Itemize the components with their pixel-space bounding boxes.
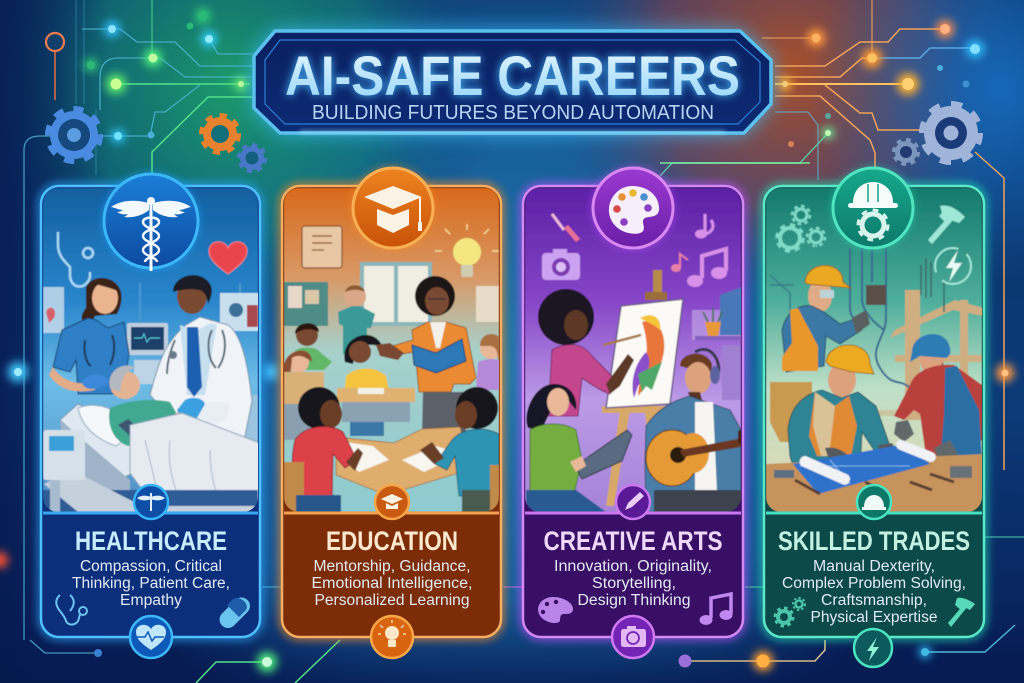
icon: musical note upper [695, 214, 713, 238]
figure: teacher [376, 276, 476, 434]
figure: standing man [338, 285, 375, 354]
text: education skills: Mentorship, Guidance, [314, 558, 470, 575]
icon: paint brush [552, 214, 580, 242]
text: trades skills: Physical Expertise [810, 609, 938, 626]
icon: lightning badge [854, 629, 892, 667]
illustration: classroom scene [284, 188, 504, 512]
icon: stethoscope [58, 232, 90, 287]
icon: orange ring node [46, 33, 64, 51]
figure: worker in cap [894, 334, 982, 464]
icon: large grey gear right [923, 105, 979, 161]
illustration: workbench [766, 438, 984, 512]
figure: girl in purple [476, 334, 499, 391]
illustration: construction scene [766, 188, 984, 512]
icon: orange gear [202, 116, 238, 152]
text: healthcare skills: Empathy [120, 592, 182, 609]
icon: caduceus badge [103, 173, 199, 271]
illustration: foreground table [336, 427, 472, 495]
text: education skills: Personalized Learning [314, 592, 470, 609]
panel: creative arts [523, 167, 763, 658]
figure: girl in pink [284, 350, 312, 373]
icon: stethoscope small [56, 595, 87, 625]
icon: heart [209, 242, 247, 274]
panel: healthcare [41, 173, 260, 658]
icon: hammer small [948, 598, 975, 627]
title: AI-SAFE CAREERS [285, 44, 740, 107]
text: trades skills: Complex Problem Solving, [782, 575, 966, 592]
figure: worker with vest [787, 344, 894, 464]
icon: pencil badge [616, 485, 650, 519]
icon: book [302, 226, 342, 268]
illustration: easel and canvas [602, 270, 683, 506]
icon: small grey gear right [894, 140, 918, 164]
icon: lightbulb [435, 224, 499, 277]
subtitle: BUILDING FUTURES BEYOND AUTOMATION [312, 102, 714, 124]
text: healthcare skills [72, 558, 230, 609]
icon: palette small [538, 597, 573, 623]
icon: small blue gear [239, 145, 265, 171]
icon: gears cluster [777, 206, 825, 251]
text: healthcare skills: Thinking, Patient Care, [72, 575, 230, 592]
icon: small caduceus badge [134, 485, 168, 519]
panel: education [282, 167, 504, 658]
heading: healthcare: HEALTHCARE [75, 526, 227, 556]
figure: patient in bed [43, 365, 260, 512]
panel: skilled trades [764, 167, 984, 667]
icon: hammer [928, 205, 965, 244]
illustration: art studio scene [525, 188, 763, 512]
text: education skills: Emotional Intelligence, [312, 575, 472, 592]
text: education skills [312, 558, 472, 609]
heading: education: EDUCATION [326, 526, 458, 556]
icon: heartbeat badge [130, 616, 172, 658]
text: creative skills: Storytelling, [592, 575, 676, 592]
icon: camera badge [612, 616, 654, 658]
figure: boy in red [284, 387, 363, 512]
icon: gears small [775, 598, 805, 626]
heading: skilled trades: SKILLED TRADES [778, 526, 970, 556]
figure: worker on wires [770, 266, 870, 442]
icon: pill [216, 594, 254, 632]
figure: woman with tablet [526, 384, 632, 512]
figure: boy in green [294, 323, 332, 370]
icon: hard hat badge [832, 167, 914, 249]
text: trades skills: Manual Dexterity, [813, 558, 935, 575]
illustration: building frame [878, 289, 982, 420]
circuit lines: right [660, 0, 1024, 661]
figure: nurse [49, 278, 129, 394]
icon: music note small [700, 594, 732, 625]
figure: painter [538, 289, 641, 416]
icon: graduation cap badge [352, 167, 434, 249]
circuit lines: left [24, 0, 763, 683]
text: creative skills: Innovation, Originality, [554, 558, 712, 575]
icon: large blue gear left [49, 110, 99, 160]
figure: boy in teal [420, 387, 499, 512]
heading: creative arts: CREATIVE ARTS [544, 526, 722, 556]
figure: doctor [150, 275, 252, 443]
text: creative skills: Design Thinking [578, 592, 690, 609]
icon: small graduation cap badge [375, 485, 409, 519]
icon: lightning [935, 248, 971, 284]
figure: girl in yellow [344, 334, 389, 389]
text: healthcare skills: Compassion, Critical [80, 558, 222, 575]
icon: lightbulb badge [371, 616, 413, 658]
text: creative skills [554, 558, 712, 609]
icon: small hard hat badge [857, 485, 891, 519]
icon: palette badge [592, 167, 674, 249]
figure: guitarist [644, 348, 741, 512]
title banner [253, 30, 772, 134]
text: trades skills [782, 558, 966, 626]
icon: music notes [671, 249, 727, 287]
text: trades skills: Craftsmanship, [821, 592, 927, 609]
title: AI-SAFE CAREERS [285, 44, 740, 107]
illustration: hospital scene [43, 188, 260, 512]
icon: camera [542, 249, 580, 280]
